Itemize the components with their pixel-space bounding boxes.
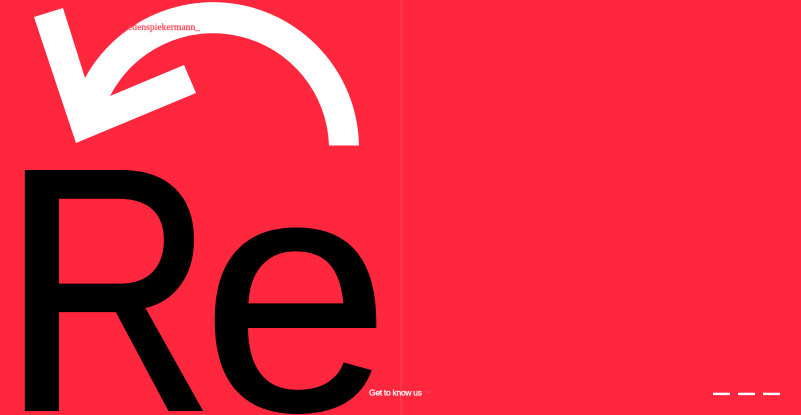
pagination dashes	[713, 393, 780, 395]
brand name: edenspiekermann_	[128, 23, 200, 33]
icon: curved return arrow	[34, 2, 359, 146]
icon: chevron	[426, 391, 431, 394]
link: get to know us: Get to know us	[369, 388, 422, 398]
headline: Re	[2, 97, 390, 415]
centre divider	[400, 0, 402, 415]
